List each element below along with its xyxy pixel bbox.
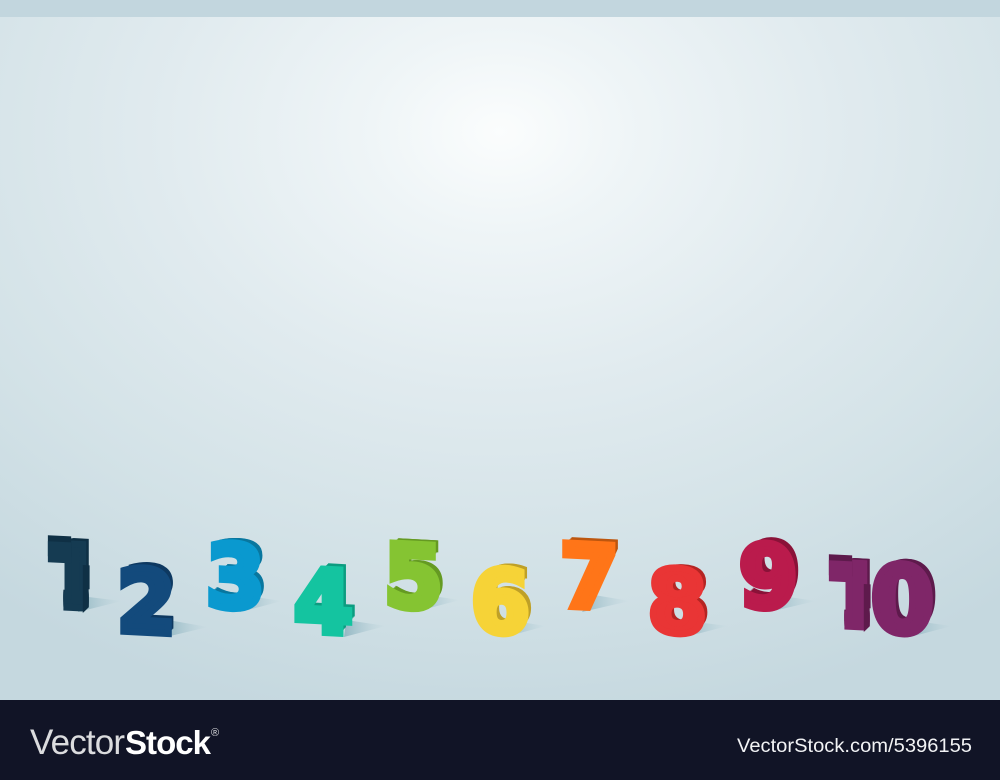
logo: VectorStock bbox=[30, 723, 219, 762]
number 3: 3 bbox=[206, 525, 265, 630]
logo: VectorStock: Stock bbox=[125, 724, 212, 761]
number 10: 0 bbox=[871, 545, 934, 656]
number 4: 4 bbox=[294, 550, 353, 655]
image id: VectorStock.com/5396155 bbox=[737, 736, 972, 757]
footer bar bbox=[0, 700, 1000, 780]
number 9: 9 bbox=[739, 525, 798, 630]
number 6: 6 bbox=[471, 550, 530, 655]
number 7: 7 bbox=[560, 525, 619, 630]
number 2: 2 bbox=[117, 550, 176, 655]
number 10 bbox=[828, 545, 936, 656]
number 10: 1 bbox=[825, 544, 884, 649]
logo: VectorStock: ® bbox=[211, 727, 219, 739]
logo: VectorStock: Vector bbox=[30, 723, 125, 762]
number 5: 5 bbox=[384, 525, 443, 630]
number 8: 8 bbox=[648, 550, 707, 655]
number 1 bbox=[48, 535, 90, 613]
number 1: 1 bbox=[44, 525, 103, 630]
